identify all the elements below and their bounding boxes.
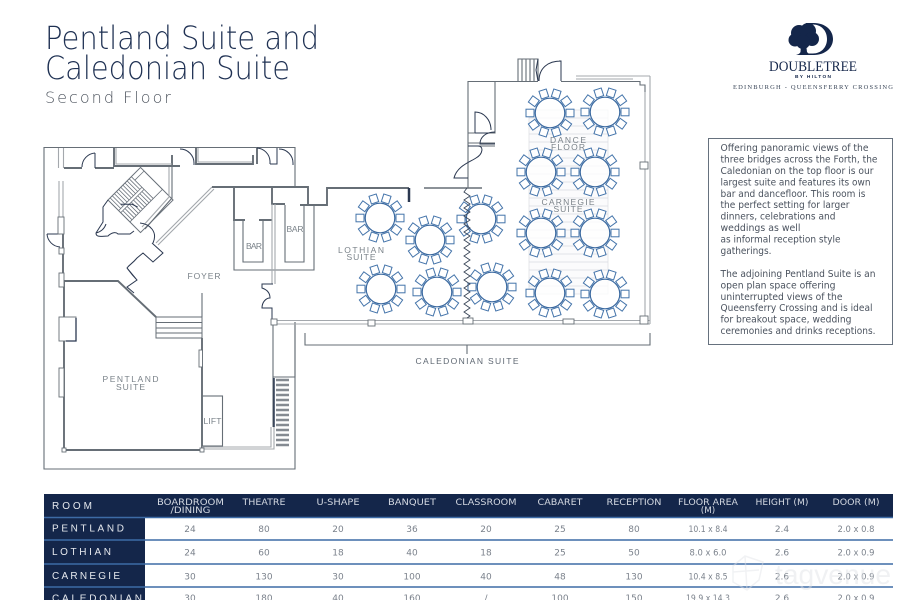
paragraph: Caledonian [720, 143, 878, 257]
column headers: CLASSROOM [456, 498, 516, 508]
room labels: SUITE [346, 252, 376, 262]
room labels: LIFT [204, 416, 222, 426]
row: Pentland: 36 [406, 525, 418, 535]
caledonian suite dimension bracket: CALEDONIAN SUITE [416, 356, 519, 366]
pentland diagonal wall and steps [64, 281, 202, 450]
room labels: BAR [246, 241, 262, 251]
row: Pentland: 10.1 x 8.4 [688, 525, 728, 535]
room labels: LOTHIAN [338, 245, 384, 255]
row: Lothian: 60 [258, 548, 270, 558]
row: Lothian: 2.0 x 0.9 [838, 548, 875, 558]
title: Caledonian Suite [45, 49, 290, 87]
row: Pentland: PENTLAND [52, 524, 124, 534]
row: Lothian: LOTHIAN [52, 547, 111, 558]
description text box [708, 138, 892, 344]
dance floor [529, 110, 608, 294]
row: Caledonian [52, 594, 875, 600]
row: Lothian: 50 [628, 548, 640, 558]
paragraph: Pentland: ceremonies and drinks receptions. [720, 326, 876, 337]
tables: Lothian Suite [356, 194, 461, 316]
room labels: SUITE [554, 204, 583, 214]
logo: DoubleTree by Hilton [733, 23, 893, 91]
row: Carnegie: 40 [480, 572, 492, 582]
watermark: tagvenue [733, 556, 891, 590]
row: Lothian [52, 547, 875, 558]
row: Carnegie: 2.6 [775, 572, 789, 582]
column headers: /DINING [170, 506, 211, 516]
foyer east door [262, 284, 273, 320]
room labels: SUITE [116, 382, 145, 392]
column headers: U-SHAPE [316, 498, 360, 508]
room labels: FOYER [188, 271, 220, 281]
row: Carnegie: 10.4 x 8.5 [688, 572, 728, 582]
paragraph: Caledonian: as informal reception style [720, 235, 841, 246]
room labels: DANCE [550, 135, 586, 145]
row: Pentland: 80 [258, 525, 270, 535]
row: Pentland [52, 524, 875, 535]
wall pillars [62, 162, 648, 452]
room labels: CARNEGIE [542, 197, 595, 207]
row: Carnegie: 30 [332, 572, 344, 582]
diagonal foyer wall [127, 187, 234, 293]
room labels: FLOOR [551, 142, 585, 152]
row: Carnegie: CARNEGIE [52, 571, 120, 582]
row: Lothian: 40 [406, 548, 418, 558]
paragraph: Caledonian: Offering panoramic views of the [720, 143, 869, 154]
icon: tree and D [788, 23, 833, 55]
column headers: (M) [701, 506, 715, 516]
floor plan [44, 59, 650, 469]
row: Lothian: 18 [332, 548, 344, 558]
paragraph: Caledonian: weddings as well [720, 223, 800, 234]
paragraph: Caledonian: bar and dancefloor. This room is [720, 189, 866, 200]
row: Carnegie: 130 [255, 572, 273, 582]
paragraph: Pentland: for breakout space, wedding [720, 315, 852, 326]
table header band [44, 494, 893, 517]
subtitle: second floor: Second Floor [45, 88, 171, 107]
partition zigzag [464, 188, 470, 318]
lift [202, 396, 222, 446]
column headers: BANQUET [388, 498, 437, 508]
title [45, 19, 319, 87]
row: Pentland: 20 [332, 525, 344, 535]
paragraph: Pentland [720, 269, 876, 337]
row: Lothian: 2.6 [775, 548, 789, 558]
pentland and foyer outer boundary [44, 148, 295, 469]
room name column [44, 517, 145, 600]
row: Lothian: 24 [184, 548, 196, 558]
row: Lothian: 25 [554, 548, 566, 558]
stair lobby doors [96, 200, 155, 243]
row: Carnegie: 100 [403, 572, 421, 582]
top service rooms [114, 148, 293, 166]
column headers [52, 498, 880, 516]
capacity table [44, 494, 893, 600]
watermark: tagvenue: tagvenue [775, 559, 891, 590]
paragraph: Pentland: The adjoining Pentland Suite is an [720, 269, 876, 280]
row: Carnegie [52, 571, 875, 582]
paragraph: Caledonian: Caledonian on the top floor is our [720, 166, 874, 177]
paragraph: Pentland: open plan space offering [720, 280, 836, 291]
row: Pentland: 80 [628, 525, 640, 535]
column headers: FLOOR AREA [678, 498, 738, 508]
row: Carnegie: 130 [625, 572, 643, 582]
column headers: THEATRE [241, 498, 286, 508]
caledonian suite dimension bracket [305, 333, 650, 366]
bars [234, 187, 409, 284]
west wall and doors [47, 148, 114, 450]
row: Lothian: 8.0 x 6.0 [690, 548, 727, 558]
room labels: BAR [286, 224, 304, 234]
paragraph: Caledonian: the perfect setting for larger [720, 200, 850, 211]
title: Pentland Suite and [45, 19, 319, 57]
caledonian walls [272, 76, 650, 324]
column headers: DOOR (M) [832, 498, 880, 508]
paragraph: Pentland: uninterrupted views of the [720, 292, 843, 303]
stairwell [108, 167, 173, 233]
location: EDINBURGH - QUEENSFERRY CROSSING [733, 84, 893, 91]
south east corridor and stair [202, 322, 295, 449]
row rules [44, 518, 893, 587]
column headers: BOARDROOM [157, 498, 224, 508]
paragraph: Pentland: Queensferry Crossing and is ideal [720, 303, 872, 314]
caledonian doors and upper stairs [454, 59, 561, 178]
row: Pentland: 2.0 x 0.8 [838, 525, 875, 535]
row: Lothian: 18 [480, 548, 492, 558]
tables: Carnegie Suite [457, 88, 629, 318]
row: Pentland: 24 [184, 525, 196, 535]
paragraph: Caledonian: gatherings. [720, 246, 772, 257]
row: Carnegie: 48 [554, 572, 566, 582]
brand name: DOUBLETREE [769, 59, 857, 75]
row: Carnegie: 30 [184, 572, 196, 582]
column headers: ROOM [52, 501, 92, 512]
by hilton: BY HILTON [795, 74, 832, 80]
row: Carnegie: 2.0 x 0.9 [838, 572, 875, 582]
room labels [102, 135, 595, 426]
column headers: HEIGHT (M) [756, 498, 808, 508]
paragraph: Caledonian: largest suite and features its own [720, 177, 871, 188]
paragraph: Caledonian: three bridges across the Forth, the [720, 154, 878, 165]
row: Pentland: 25 [554, 525, 566, 535]
column headers: RECEPTION [606, 498, 662, 508]
row: Pentland: 20 [480, 525, 492, 535]
row: Pentland: 2.4 [775, 525, 789, 535]
icon: watermark mark [733, 556, 763, 590]
paragraph: Caledonian: dinners, celebrations and [720, 212, 836, 223]
column headers: CABARET [538, 498, 583, 508]
room labels: PENTLAND [102, 374, 158, 384]
